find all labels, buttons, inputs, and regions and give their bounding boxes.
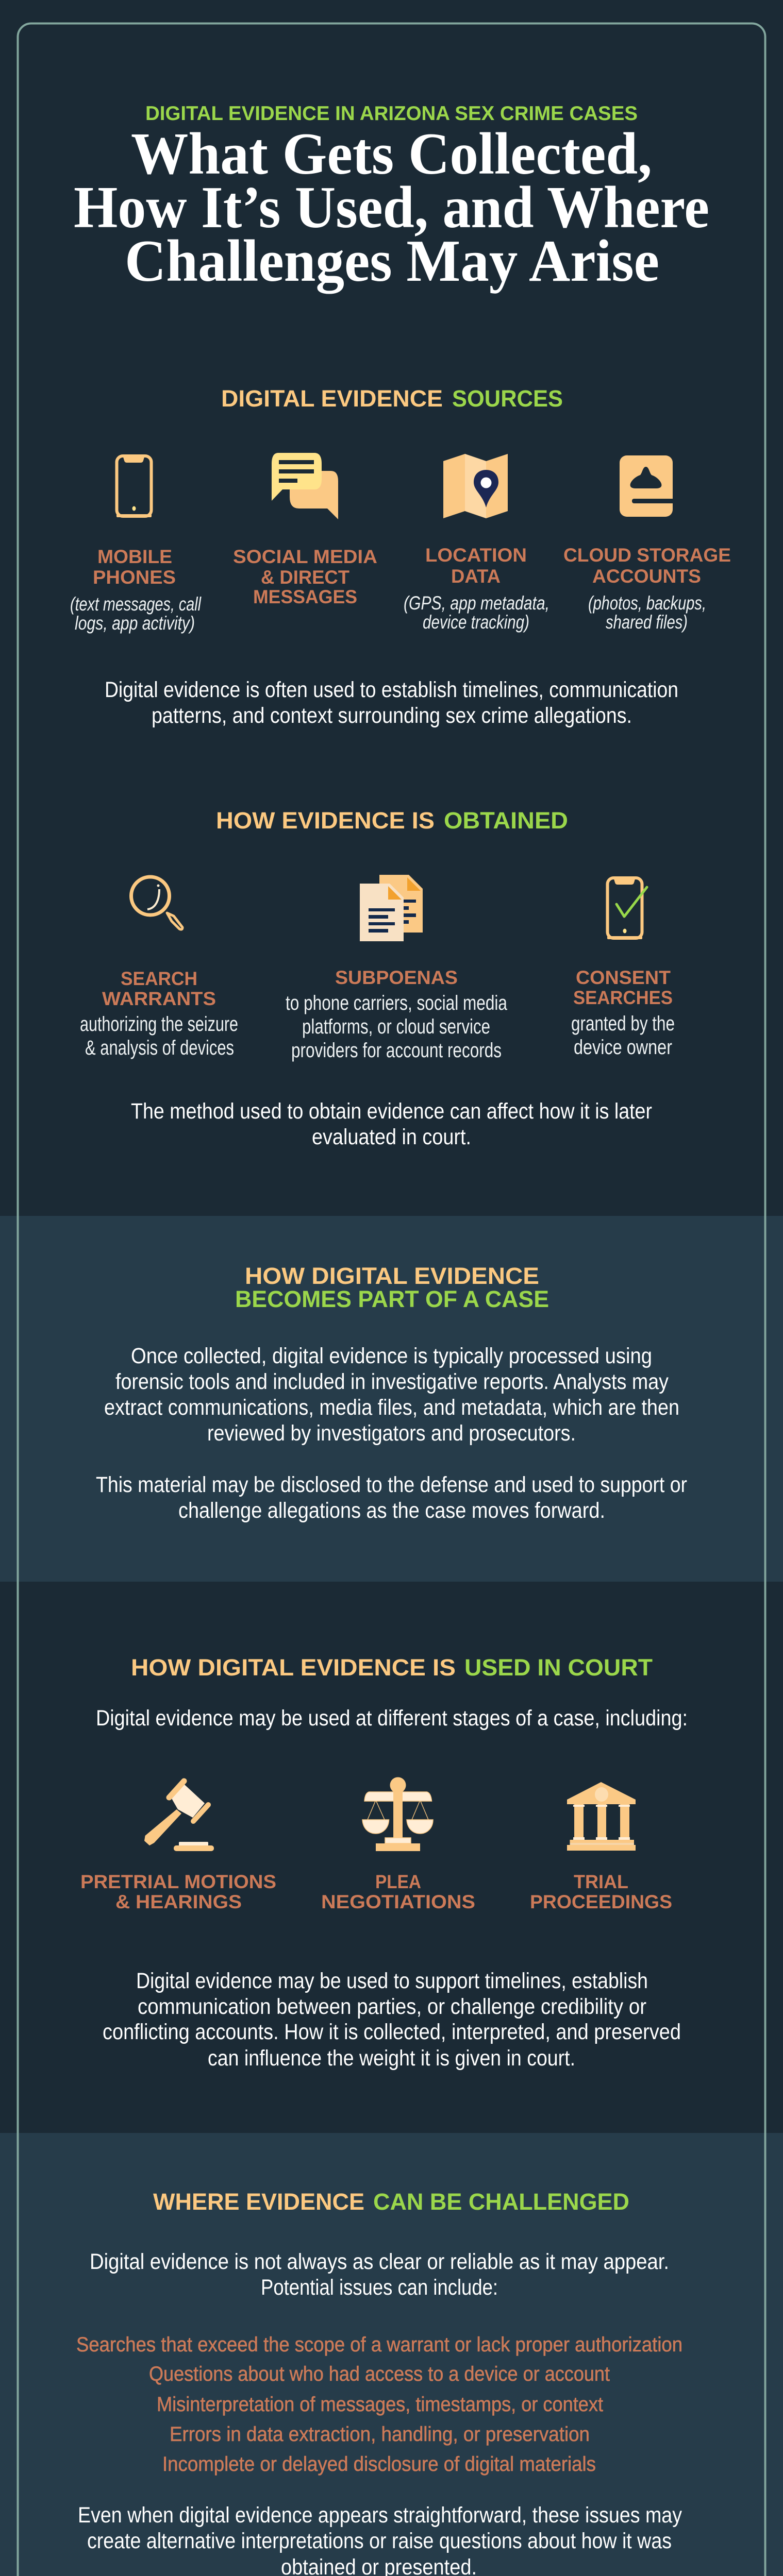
item: location data: LOCATION — [425, 545, 527, 566]
text block: processing: reviewed by investigators and prosecutors. — [207, 1421, 576, 1446]
item: location data: (GPS, app metadata, — [404, 592, 549, 614]
item: subpoenas: platforms, or cloud service — [302, 1015, 490, 1038]
panel: how digital evidence becomes part of a case — [96, 1263, 687, 1523]
item: consent searches: SEARCHES — [573, 987, 673, 1008]
panel: how digital evidence becomes part of a case background — [0, 1216, 783, 1582]
item: location data: DATA — [451, 566, 501, 587]
heading — [221, 385, 563, 412]
text block: court summary: conflicting accounts. How it is collected, interpreted, and preserved — [103, 2020, 681, 2044]
text block: sources summary — [105, 677, 678, 728]
item: search warrants: authorizing the seizure — [80, 1013, 238, 1036]
item: search warrants: WARRANTS — [102, 988, 216, 1009]
text block: court summary: can influence the weight it is given in court. — [208, 2046, 575, 2071]
list: potential issues: Misinterpretation of messages, timestamps, or context — [157, 2393, 603, 2416]
title: What Gets Collected, — [131, 121, 652, 187]
item: plea negotiations: PLEA — [375, 1871, 421, 1892]
item: social media — [233, 546, 377, 607]
heading: OBTAINED — [444, 807, 568, 834]
text block: stages intro: Digital evidence may be used at different stages of a case, including: — [96, 1706, 688, 1731]
list: potential issues: Searches that exceed the scope of a warrant or lack proper authorization — [76, 2333, 682, 2356]
panel: how digital evidence is used in court — [80, 1654, 688, 2071]
item: social media: MESSAGES — [253, 586, 357, 607]
heading: HOW EVIDENCE IS — [216, 807, 435, 834]
icon: mobile phone — [116, 455, 152, 517]
heading: DIGITAL EVIDENCE — [221, 385, 443, 412]
item: cloud storage accounts: CLOUD STORAGE — [563, 545, 731, 566]
list: potential issues: Incomplete or delayed disclosure of digital materials — [162, 2453, 596, 2476]
icon: phone with check mark — [607, 877, 647, 939]
item: pretrial motions: & HEARINGS — [115, 1891, 242, 1912]
icon: gavel — [144, 1781, 214, 1851]
item: subpoenas: to phone carriers, social media — [286, 992, 508, 1014]
item: subpoenas — [286, 967, 508, 1062]
item: mobile phones: logs, app activity) — [75, 613, 195, 634]
item: subpoenas: SUBPOENAS — [335, 967, 458, 988]
text block: obtained summary: The method used to obtain evidence can affect how it is later — [131, 1099, 652, 1124]
panel: digital evidence sources — [70, 385, 731, 728]
item: cloud storage accounts — [563, 545, 731, 633]
text block: disclosure: challenge allegations as the case moves forward. — [178, 1498, 605, 1523]
panel: how evidence is obtained — [80, 807, 675, 1149]
heading: BECOMES PART OF A CASE — [235, 1286, 549, 1312]
icon: cloud storage — [620, 455, 675, 517]
item: location data — [404, 545, 549, 633]
heading: WHERE EVIDENCE — [153, 2189, 364, 2215]
icon: scales of justice — [362, 1777, 433, 1851]
item: pretrial motions: PRETRIAL MOTIONS — [80, 1871, 276, 1892]
icon: magnifying glass — [131, 877, 182, 929]
item: social media: & DIRECT — [261, 567, 349, 588]
text block: disclosure: This material may be disclosed to the defense and used to support or — [96, 1472, 687, 1497]
text block: challenge intro: Potential issues can include: — [261, 2275, 498, 2300]
text block: challenge summary: Even when digital evidence appears straightforward, these issues may — [78, 2503, 682, 2528]
text block: obtained summary: evaluated in court. — [312, 1125, 471, 1149]
item: mobile phones: PHONES — [93, 567, 176, 588]
item: search warrants: & analysis of devices — [85, 1037, 234, 1059]
text block: challenge summary: create alternative interpretations or raise questions about how it was — [87, 2529, 672, 2553]
item: trial proceedings — [530, 1871, 672, 1912]
icon: documents — [360, 875, 423, 941]
item: search warrants — [80, 968, 238, 1059]
item: pretrial motions — [80, 1871, 276, 1912]
item: social media: SOCIAL MEDIA — [233, 546, 377, 567]
item: consent searches: granted by the — [571, 1012, 675, 1035]
text block: processing: extract communications, media files, and metadata, which are then — [104, 1395, 679, 1420]
heading: HOW DIGITAL EVIDENCE — [245, 1263, 539, 1289]
heading — [153, 2189, 629, 2215]
text block: sources summary: Digital evidence is often used to establish timelines, communication — [105, 677, 678, 702]
text block: challenge intro: Digital evidence is not always as clear or reliable as it may appear. — [90, 2249, 669, 2274]
item: consent searches: CONSENT — [576, 967, 671, 988]
heading: CAN BE CHALLENGED — [373, 2189, 629, 2215]
item: cloud storage accounts: ACCOUNTS — [592, 566, 701, 587]
text block: challenge summary — [78, 2503, 682, 2576]
text block: processing — [104, 1344, 679, 1446]
title: How It’s Used, and Where — [74, 175, 709, 240]
item: cloud storage accounts: shared files) — [606, 612, 688, 633]
item: consent searches: device owner — [574, 1036, 672, 1059]
item: plea negotiations — [321, 1871, 475, 1912]
text block: sources summary: patterns, and context surrounding sex crime allegations. — [152, 703, 632, 728]
text block: challenge intro — [90, 2249, 669, 2300]
item: subpoenas: providers for account records — [291, 1039, 502, 1062]
heading: HOW DIGITAL EVIDENCE IS — [131, 1654, 456, 1681]
item: mobile phones: MOBILE — [97, 546, 172, 567]
title: Challenges May Arise — [125, 228, 659, 294]
title — [74, 121, 709, 294]
text block: court summary: Digital evidence may be used to support timelines, establish — [136, 1969, 648, 1993]
item: plea negotiations: NEGOTIATIONS — [321, 1891, 475, 1912]
text block: processing: Once collected, digital evidence is typically processed using — [131, 1344, 652, 1368]
item: cloud storage accounts: (photos, backups, — [588, 592, 706, 614]
icon: map with pin — [443, 454, 508, 518]
text block: disclosure — [96, 1472, 687, 1523]
item: mobile phones: (text messages, call — [70, 594, 202, 615]
list: potential issues: Questions about who had access to a device or account — [149, 2363, 610, 2385]
list: potential issues — [76, 2333, 682, 2476]
item: mobile phones — [70, 546, 202, 634]
text block: obtained summary — [131, 1099, 652, 1149]
panel: where evidence can be challenged background — [0, 2133, 783, 2576]
heading — [131, 1654, 653, 1681]
text block: court summary: communication between parties, or challenge credibility or — [138, 1994, 646, 2019]
heading: USED IN COURT — [464, 1654, 653, 1681]
heading: SOURCES — [452, 385, 563, 412]
panel: header — [74, 103, 709, 294]
icon: courthouse — [567, 1782, 636, 1851]
item: search warrants: SEARCH — [121, 968, 197, 989]
text block: processing: forensic tools and included in investigative reports. Analysts may — [115, 1369, 669, 1394]
list: potential issues: Errors in data extraction, handling, or preservation — [170, 2423, 590, 2446]
item: location data: device tracking) — [423, 612, 529, 633]
icon: chat bubbles — [272, 453, 338, 519]
item: trial proceedings: TRIAL — [574, 1871, 628, 1892]
item: trial proceedings: PROCEEDINGS — [530, 1891, 672, 1912]
item: consent searches — [571, 967, 675, 1059]
eyebrow: DIGITAL EVIDENCE IN ARIZONA SEX CRIME CASES — [145, 103, 638, 125]
heading — [216, 807, 568, 834]
heading — [235, 1263, 549, 1312]
text block: court summary — [103, 1969, 681, 2071]
panel: where evidence can be challenged — [76, 2189, 682, 2576]
